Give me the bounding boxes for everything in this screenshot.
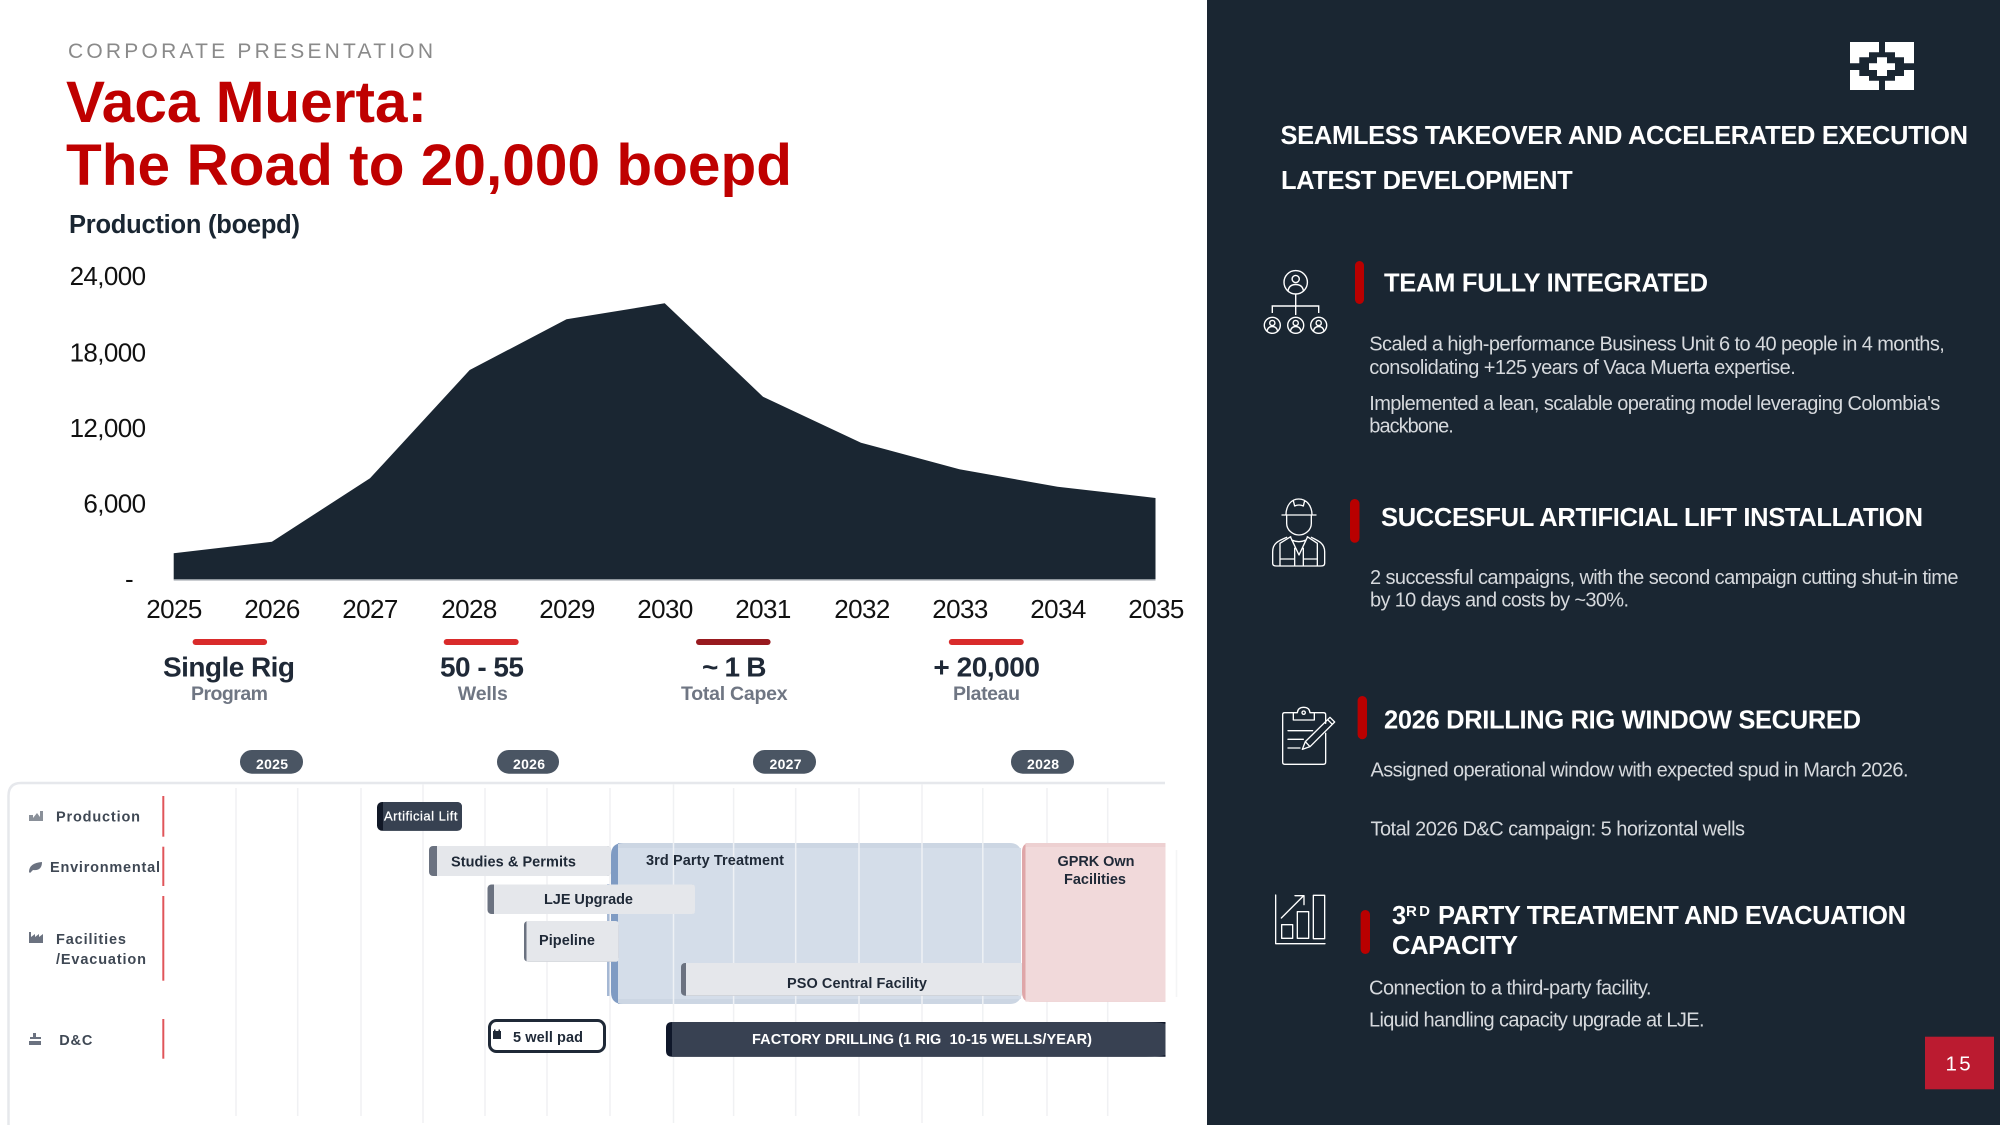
year pill 2027	[753, 750, 816, 774]
stat: single rig program: Program	[191, 683, 268, 705]
year pill 2025	[240, 750, 303, 774]
block: GPRK own facilities: GPRK Own	[1058, 854, 1134, 870]
panel: latest development	[1207, 0, 2000, 1125]
x axis labels: 2028	[441, 594, 497, 624]
stat: plateau	[933, 639, 1040, 705]
bar: factory drilling: FACTORY DRILLING (1 RIG 10-15 WELLS/YEAR)	[752, 1032, 1092, 1048]
title	[66, 70, 792, 198]
stat: total capex: Total Capex	[681, 683, 788, 705]
section text: consolidating +125 years of Vaca Muerta expertise.	[1369, 357, 1796, 379]
section heading: PARTY TREATMENT AND EVACUATION	[1438, 902, 1906, 930]
panel: production and schedule	[8, 40, 1184, 1125]
section text: Total 2026 D&C campaign: 5 horizontal wells	[1370, 819, 1745, 841]
stat: single rig program	[163, 639, 295, 705]
row: facilities and evacuation label: Facilities	[56, 932, 126, 948]
block: 3rd party treatment: 3rd Party Treatment	[646, 853, 784, 869]
row: facilities and evacuation label: /Evacuation	[56, 952, 146, 968]
x axis labels	[146, 594, 1184, 624]
bar: artificial lift: Artificial Lift	[384, 809, 458, 824]
icon: rising bar chart	[1276, 895, 1325, 944]
bar: pipeline	[524, 921, 619, 962]
heading	[1280, 122, 1968, 195]
gantt chart: schedule	[8, 750, 1176, 1125]
block: GPRK own facilities: Facilities	[1064, 872, 1126, 888]
row: production label	[29, 796, 164, 837]
x axis labels: 2025	[146, 594, 202, 624]
year pill 2027: 2027	[770, 756, 802, 772]
section text: Assigned operational window with expected spud in March 2026.	[1370, 760, 1908, 782]
section text	[1369, 334, 1945, 438]
bar: artificial lift	[377, 802, 462, 831]
accent bar	[1361, 910, 1370, 954]
x axis labels: 2034	[1030, 594, 1086, 624]
accent bar	[1358, 696, 1367, 739]
icon: org chart	[1264, 271, 1327, 333]
page number	[1925, 1037, 1994, 1089]
section: artificial lift installation	[1273, 499, 1958, 612]
row: environmental label: Environmental	[50, 860, 160, 876]
section heading: 3	[1392, 902, 1406, 930]
heading: SEAMLESS TAKEOVER AND ACCELERATED EXECUTION	[1280, 122, 1968, 150]
section text	[1370, 760, 1908, 841]
x axis labels: 2033	[932, 594, 988, 624]
bar: LJE upgrade	[488, 884, 695, 914]
stat: wells: Wells	[458, 683, 508, 705]
stat: wells	[440, 639, 524, 705]
row: environmental label	[29, 847, 164, 886]
y axis labels: 18,000	[70, 338, 146, 368]
y axis labels: 12,000	[70, 413, 146, 443]
section heading: 2026 DRILLING RIG WINDOW SECURED	[1384, 706, 1861, 734]
stat: wells: 50 - 55	[440, 652, 524, 683]
bar: factory drilling	[666, 1022, 1166, 1057]
stat: plateau: + 20,000	[933, 652, 1040, 683]
year pill 2025: 2025	[256, 756, 288, 772]
y axis labels	[70, 261, 146, 594]
area chart: production	[70, 261, 1184, 624]
block: GPRK own facilities	[1022, 843, 1166, 1002]
section text: Liquid handling capacity upgrade at LJE.	[1369, 1010, 1704, 1032]
section text	[1369, 978, 1704, 1032]
section text: by 10 days and costs by ~30%.	[1370, 590, 1629, 612]
title: Vaca Muerta:	[66, 70, 427, 135]
year pill 2028: 2028	[1027, 756, 1059, 772]
icon: company logo	[1850, 42, 1914, 90]
accent bar	[1355, 261, 1364, 304]
milestone: 5 well pad: 5 well pad	[513, 1030, 583, 1046]
bar: studies and permits: Studies & Permits	[451, 855, 576, 871]
section text	[1370, 567, 1958, 612]
stat: total capex	[681, 639, 788, 705]
row: D&C label: D&C	[59, 1033, 93, 1049]
page number: 15	[1946, 1053, 1971, 1076]
eyebrow label: CORPORATE PRESENTATION	[68, 40, 433, 63]
x axis labels: 2032	[834, 594, 890, 624]
x axis labels: 2027	[342, 594, 398, 624]
bar: PSO central facility: PSO Central Facility	[787, 976, 927, 992]
section heading: CAPACITY	[1392, 932, 1518, 960]
section text: 2 successful campaigns, with the second campaign cutting shut-in time	[1370, 567, 1958, 589]
section text: backbone.	[1369, 416, 1454, 438]
y axis labels: 24,000	[70, 261, 146, 291]
year pill 2028	[1011, 750, 1074, 774]
bar: pipeline: Pipeline	[539, 933, 595, 949]
stat: single rig program: Single Rig	[163, 652, 295, 683]
y axis labels: 6,000	[83, 488, 146, 518]
milestone: 5 well pad	[490, 1020, 604, 1052]
section heading	[1392, 902, 1906, 960]
row: D&C label	[29, 1019, 164, 1059]
x axis labels: 2030	[637, 594, 693, 624]
accent bar	[1350, 499, 1360, 543]
stat: total capex: ~ 1 B	[702, 652, 766, 683]
section text: Scaled a high-performance Business Unit 6 to 40 people in 4 months,	[1369, 334, 1945, 356]
y axis labels: -	[125, 564, 133, 594]
x axis labels: 2026	[244, 594, 300, 624]
stat: plateau: Plateau	[953, 683, 1020, 705]
section: drilling rig window	[1283, 696, 1908, 841]
block: 3rd party treatment	[607, 843, 1021, 1004]
chart heading: Production (boepd)	[69, 211, 300, 239]
area series	[174, 303, 1155, 580]
row: production label: Production	[56, 810, 140, 826]
title: The Road to 20,000 boepd	[66, 133, 792, 198]
bar: PSO central facility	[681, 963, 1022, 996]
heading: LATEST DEVELOPMENT	[1281, 167, 1573, 195]
section: third party treatment	[1276, 895, 1906, 1032]
icon: clipboard with pencil	[1283, 707, 1335, 764]
section: team fully integrated	[1264, 261, 1945, 438]
bar: studies and permits	[429, 846, 611, 876]
section heading: TEAM FULLY INTEGRATED	[1384, 270, 1708, 298]
section heading: RD	[1406, 903, 1430, 920]
x axis labels: 2031	[735, 594, 791, 624]
icon: worker with hard hat	[1273, 499, 1325, 566]
year pill 2026	[497, 750, 559, 774]
x axis labels: 2029	[539, 594, 595, 624]
bar: LJE upgrade: LJE Upgrade	[544, 892, 633, 908]
section text: Implemented a lean, scalable operating model leveraging Colombia's	[1369, 393, 1940, 415]
x axis labels: 2035	[1128, 594, 1184, 624]
year pill 2026: 2026	[513, 756, 545, 772]
row: facilities and evacuation label	[29, 896, 164, 981]
section text: Connection to a third-party facility.	[1369, 978, 1652, 1000]
section heading: SUCCESFUL ARTIFICIAL LIFT INSTALLATION	[1381, 504, 1923, 532]
